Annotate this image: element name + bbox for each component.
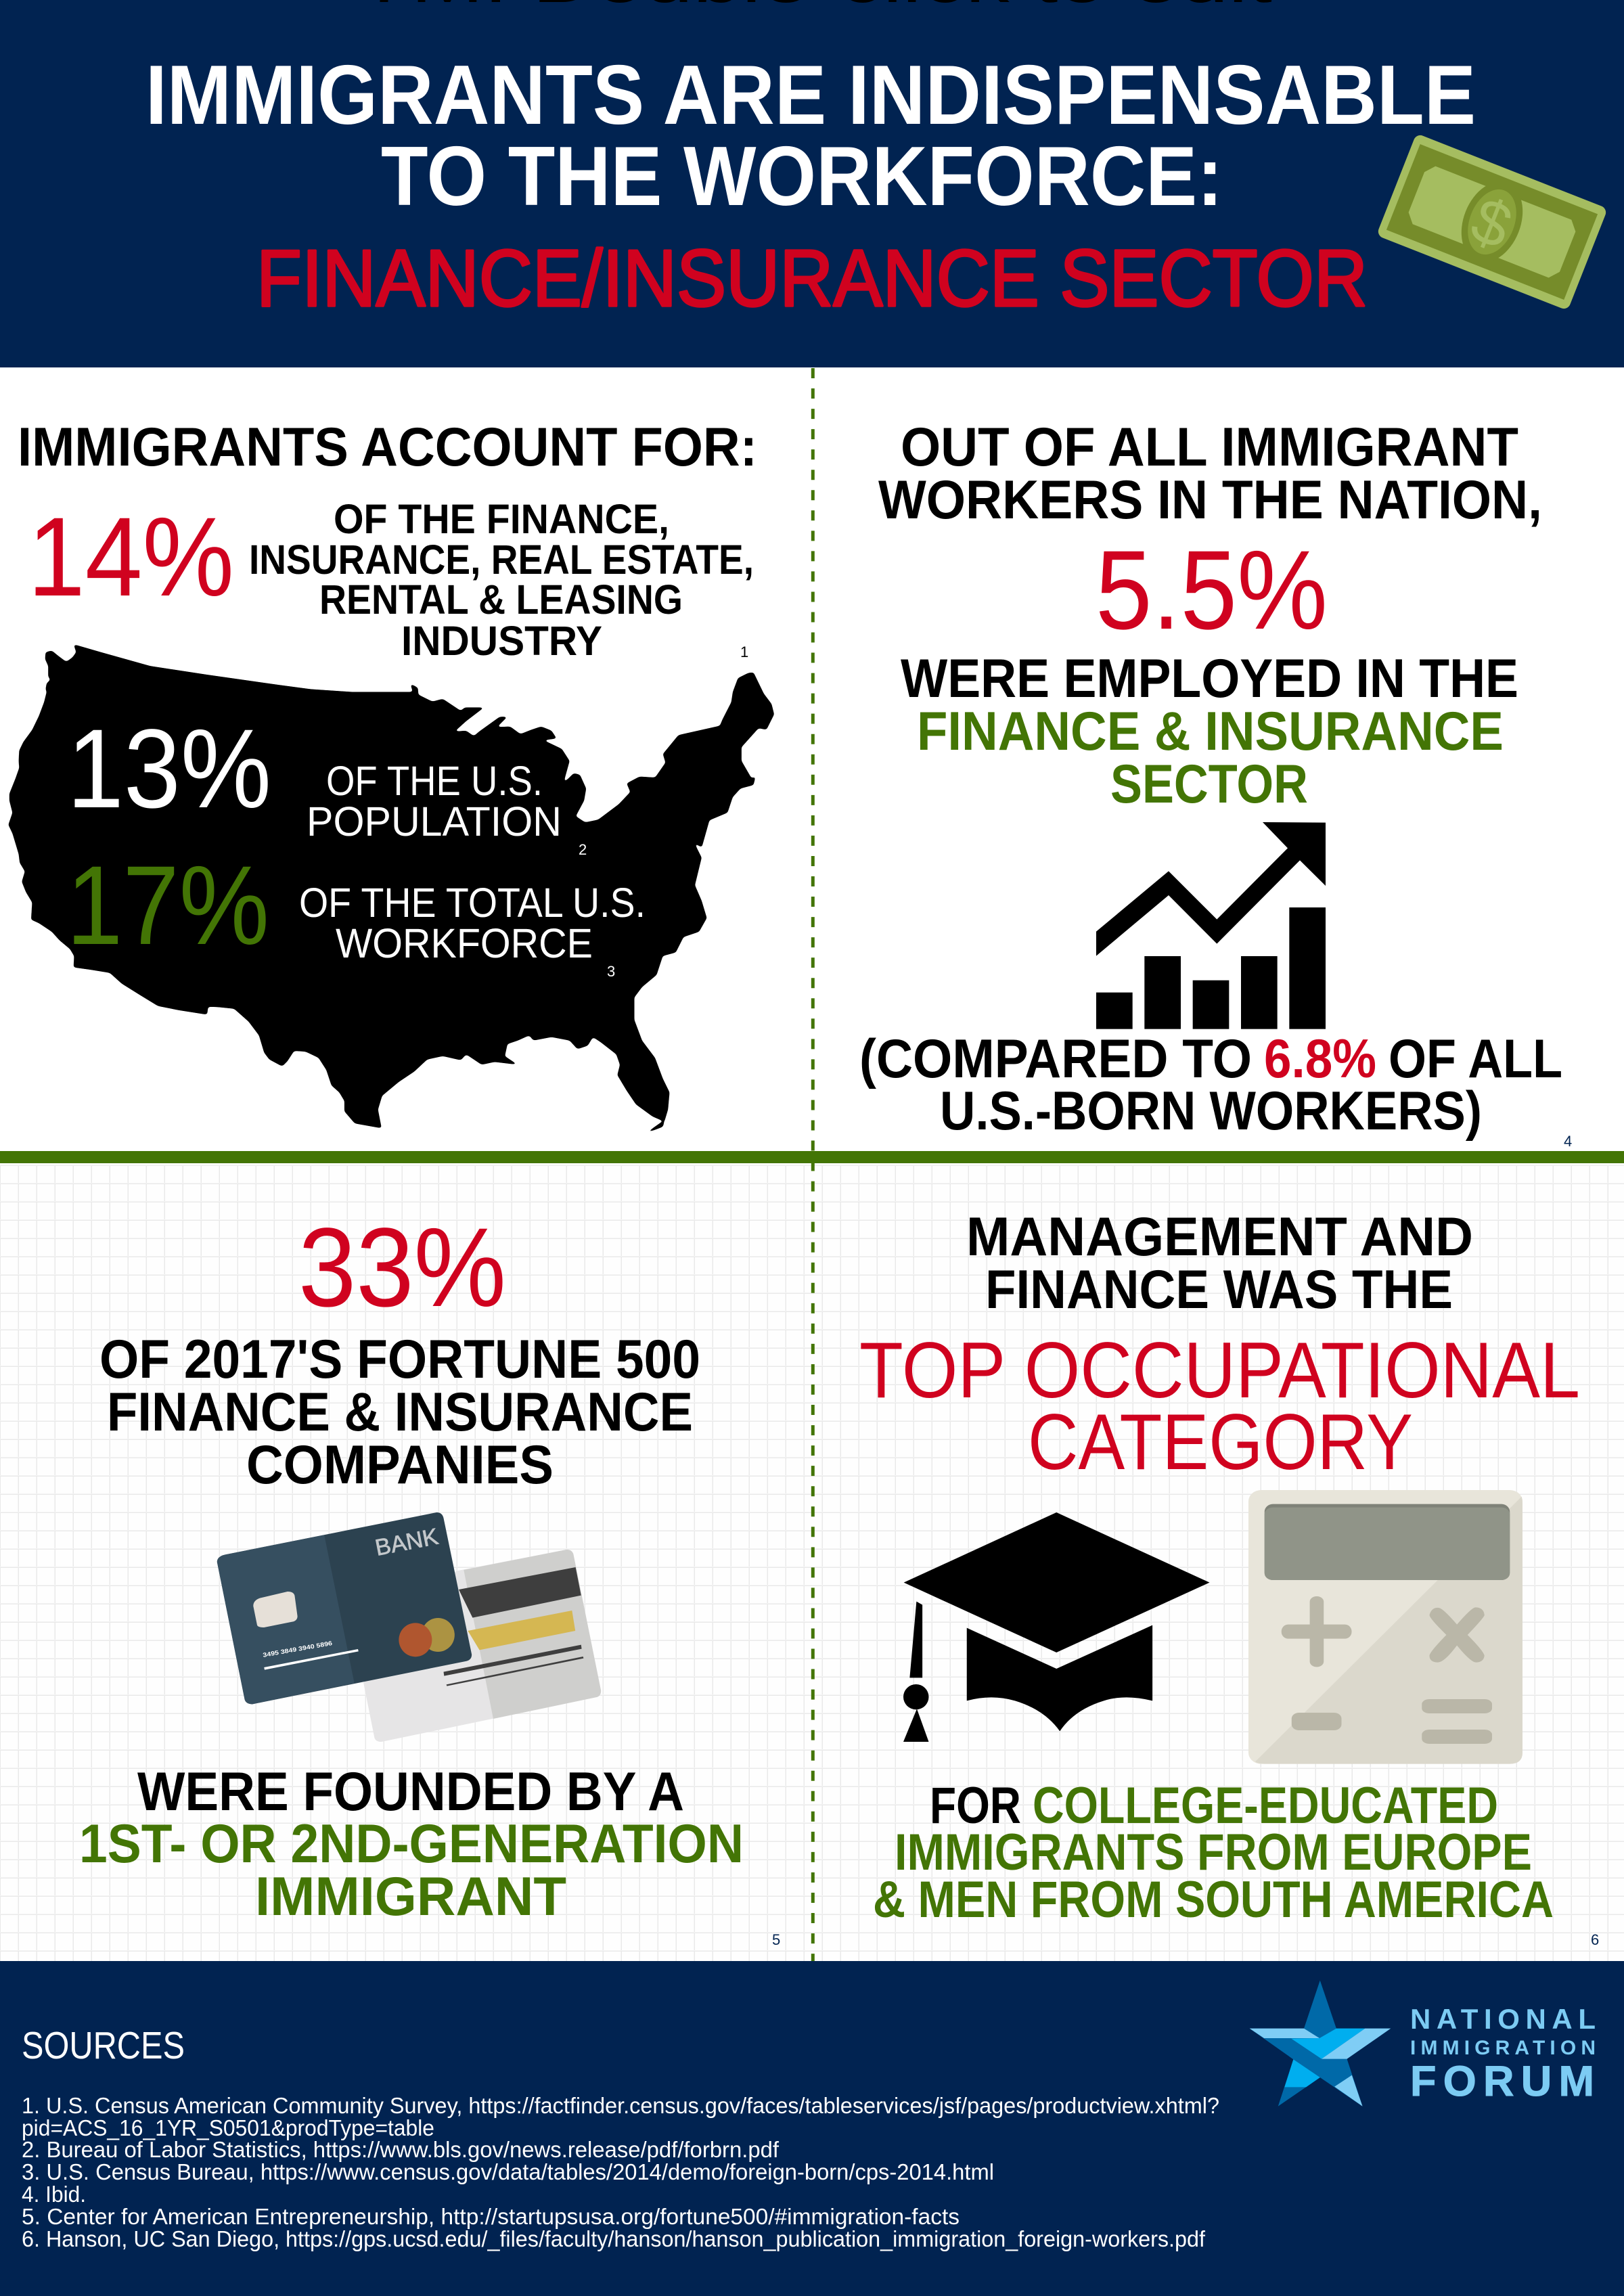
- sources list: pid=ACS_16_1YR_S0501&prodType=table: [22, 2115, 434, 2140]
- text: industry description: INDUSTRY: [401, 618, 602, 664]
- text: compared to U.S.-born workers: U.S.-BORN WORKERS): [940, 1081, 1482, 1142]
- icon: calculator: [1248, 1490, 1522, 1764]
- text: compared to U.S.-born workers: [859, 1029, 1562, 1142]
- logo: National Immigration Forum star: [1250, 1981, 1391, 2107]
- text: of the total U.S. workforce: [299, 880, 646, 966]
- card number: 3495 3849 3940 5896: [263, 1640, 333, 1659]
- subtitle: FINANCE/INSURANCE SECTOR: [256, 233, 1368, 323]
- icon: dollar bill: $: [1462, 183, 1521, 263]
- title: IMMIGRANTS ARE INDISPENSABLE: [145, 49, 1476, 142]
- text: compared to U.S.-born workers: OF ALL: [1389, 1029, 1562, 1089]
- text: fortune 500 companies: COMPANIES: [246, 1435, 554, 1495]
- icon: dollar bill: [1376, 133, 1608, 311]
- stat: 5.5%: 5.5%: [1096, 528, 1328, 653]
- heading: [878, 417, 1542, 531]
- panel: fortune 500 founders: [79, 1205, 780, 1948]
- text: of the U.S. population: [307, 758, 562, 845]
- sources list: 5. Center for American Entrepreneurship, http://startupsusa.org/fortune500/#immigration-facts: [22, 2204, 960, 2229]
- text: compared to U.S.-born workers: 6.8%: [1264, 1029, 1376, 1089]
- panel: immigrants account for: [8, 417, 774, 1134]
- title: [145, 49, 1476, 223]
- heading: IMMIGRANTS ACCOUNT FOR:: [18, 417, 757, 478]
- footnote 6: 6: [1591, 1931, 1599, 1948]
- bank name: BANK: [373, 1524, 441, 1561]
- map of the United States: [8, 644, 774, 1134]
- panel: share of immigrant workers: [859, 417, 1572, 1150]
- logo wordmark: FORUM: [1410, 2058, 1594, 2105]
- logo wordmark: [1410, 2003, 1596, 2105]
- text: of the total U.S. workforce: WORKFORCE: [336, 920, 593, 966]
- title: TO THE WORKFORCE:: [381, 130, 1223, 223]
- text: industry description: RENTAL & LEASING: [319, 577, 683, 623]
- text: employed in finance and insurance: FINANCE & INSURANCE: [917, 701, 1504, 762]
- sources list: 1. U.S. Census American Community Survey, https://factfinder.census.gov/faces/tableservices/jsf/pages/productview.xhtml?: [22, 2093, 1219, 2118]
- text: founded by immigrants: 1ST- OR 2ND-GENERATION: [79, 1814, 744, 1874]
- footnote 1: 1: [740, 644, 748, 660]
- sources list: 6. Hanson, UC San Diego, https://gps.ucsd.edu/_files/faculty/hanson/hanson_publication_immigration_foreign-workers.pdf: [22, 2226, 1206, 2251]
- text: fortune 500 companies: [99, 1329, 700, 1495]
- stat: 13%: 13%: [67, 706, 271, 832]
- heading: [966, 1207, 1473, 1320]
- sources list: 3. U.S. Census Bureau, https://www.census.gov/data/tables/2014/demo/foreign-born/cps-2014.html: [22, 2159, 994, 2184]
- text: employed in finance and insurance: [901, 648, 1518, 815]
- icon: rising bar chart: [1096, 822, 1326, 1029]
- text: of the U.S. population: OF THE U.S.: [326, 758, 543, 804]
- text: for college-educated immigrants: FOR: [930, 1777, 1021, 1834]
- sources heading: SOURCES: [22, 2024, 185, 2067]
- text: industry description: [249, 496, 754, 664]
- stat: top occupational category: [859, 1326, 1580, 1486]
- stat: 33%: 33%: [298, 1205, 506, 1330]
- text: fortune 500 companies: FINANCE & INSURANCE: [107, 1382, 693, 1443]
- logo wordmark: NATIONAL: [1410, 2003, 1596, 2035]
- text: fortune 500 companies: OF 2017'S FORTUNE 500: [99, 1329, 700, 1390]
- panel: header: [0, 0, 1624, 367]
- text: of the U.S. population: POPULATION: [307, 798, 562, 845]
- text: employed in finance and insurance: WERE EMPLOYED IN THE: [901, 648, 1518, 709]
- text: industry description: INSURANCE, REAL ESTATE,: [249, 537, 754, 583]
- stat: 14%: 14%: [28, 495, 234, 620]
- stat: top occupational category: CATEGORY: [1028, 1397, 1413, 1486]
- text: for college-educated immigrants: [873, 1777, 1554, 1929]
- text: of the total U.S. workforce: OF THE TOTAL U.S.: [299, 880, 646, 926]
- divider: green bar: [0, 1151, 1624, 1163]
- panel: footer: [0, 1961, 1624, 2296]
- text: industry description: OF THE FINANCE,: [334, 496, 669, 542]
- text: founded by immigrants: [79, 1761, 744, 1927]
- text: for college-educated immigrants: IMMIGRANTS FROM EUROPE: [895, 1824, 1532, 1881]
- footnote 5: 5: [772, 1931, 780, 1948]
- text: founded by immigrants: WERE FOUNDED BY A: [137, 1761, 684, 1822]
- text: for college-educated immigrants: COLLEGE-EDUCATED: [1033, 1777, 1498, 1834]
- footnote 4: 4: [1564, 1133, 1572, 1150]
- heading: MANAGEMENT AND: [966, 1207, 1473, 1267]
- heading: OUT OF ALL IMMIGRANT: [901, 417, 1518, 478]
- sources list: [22, 2093, 1219, 2251]
- sources list: 2. Bureau of Labor Statistics, https://www.bls.gov/news.release/pdf/forbrn.pdf: [22, 2137, 780, 2162]
- sources list: 4. Ibid.: [22, 2182, 86, 2207]
- text: founded by immigrants: IMMIGRANT: [255, 1866, 566, 1927]
- heading: WORKERS IN THE NATION,: [878, 470, 1542, 531]
- stat: 17%: 17%: [66, 843, 269, 968]
- heading: FINANCE WAS THE: [985, 1259, 1453, 1320]
- text: employed in finance and insurance: SECTOR: [1110, 754, 1308, 815]
- footnote 3: 3: [607, 963, 615, 980]
- text: compared to U.S.-born workers: (COMPARED TO: [859, 1029, 1252, 1089]
- logo wordmark: IMMIGRATION: [1410, 2037, 1596, 2059]
- icon: credit cards: [217, 1512, 601, 1742]
- icon: graduation cap: [903, 1512, 1210, 1742]
- footnote 2: 2: [579, 841, 587, 858]
- panel: top occupational category: [859, 1207, 1599, 1948]
